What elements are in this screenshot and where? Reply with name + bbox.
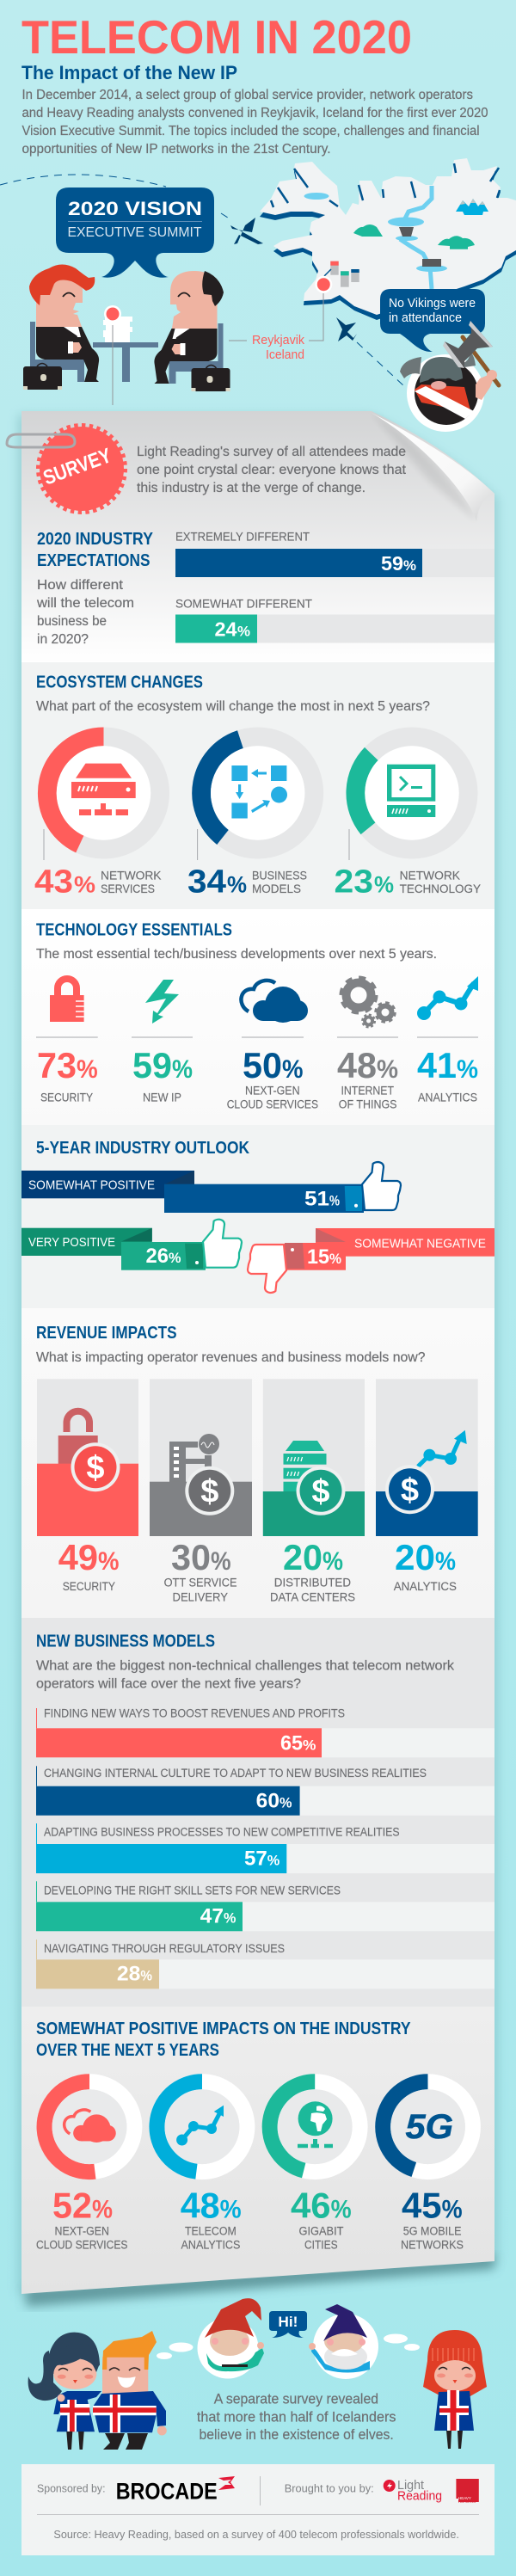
Reykjavik label [229,333,304,362]
man right [154,271,230,391]
stat 49%: 49 [58,1537,98,1577]
ribbon: somewhat negative: 15 [307,1245,329,1269]
intro text [22,88,488,157]
stat 46%: CITIES [304,2238,338,2251]
boy [93,2331,167,2450]
intro text: and Heavy Reading analysts convened in Reykjavik, Iceland for the first ever 2020 [22,106,488,120]
bar: extremely different: 59 [381,552,403,575]
survey text [137,445,407,495]
stat 43%: NETWORK [101,870,162,882]
donut: network services [47,736,160,850]
bar: regulatory issues: % [140,1968,152,1984]
bar: internal culture: 60 [256,1790,280,1813]
river [388,186,447,289]
stat 41% analytics: % [457,1055,478,1084]
stat 43%: % [74,872,95,898]
stat 20% data centers: DATA CENTERS [270,1590,355,1603]
survey badge: SURVEY [40,444,114,490]
icon: cloud [241,981,308,1023]
paper side shadow [18,415,498,2295]
stat 48% IoT: INTERNET [341,1085,394,1097]
ribbon: very positive: % [169,1250,181,1266]
icon: thumb up green [203,1220,242,1268]
icon: chart [176,2106,224,2145]
stat 59% new IP: NEW IP [143,1091,181,1104]
ribbon: somewhat negative: % [329,1251,341,1267]
survey text: this industry is at the verge of change. [137,481,366,495]
ribbon: somewhat negative: SOMEWHAT NEGATIVE [354,1237,486,1251]
stat 46%: % [331,2195,352,2223]
heading: ECOSYSTEM CHANGES [36,673,203,692]
stat 52% [36,2185,127,2251]
donut: network technology [355,736,469,850]
plane top [230,218,263,244]
heading: OVER THE NEXT 5 YEARS [36,2041,219,2060]
heading: TECHNOLOGY ESSENTIALS [36,921,232,940]
paper bottom shadow [26,2255,494,2307]
bar: internal culture: % [280,1795,292,1811]
stat 20% data centers: 20 [283,1537,322,1577]
icon: thumb down [248,1245,286,1293]
stat 73% security [37,1045,98,1104]
stat 30%: 30 [171,1537,211,1577]
bar: skill sets: DEVELOPING THE RIGHT SKILL SETS FOR NEW SERVICES [44,1884,341,1897]
elves text: believe in the existence of elves. [200,2426,394,2443]
stat 49%: % [98,1547,119,1576]
stat 49% [58,1537,119,1593]
stat 34%: 34 [187,864,226,901]
question [36,578,134,647]
column: OTT service delivery: $ [200,1474,218,1510]
bar: skill sets: 47 [200,1905,224,1928]
stat 41% analytics: 41 [417,1045,457,1085]
divider line [37,2514,479,2515]
column: OTT service delivery [150,1379,252,1536]
summit bubble [56,188,214,278]
bar: skill sets [36,1881,494,1931]
stat 50% cloud [227,1045,318,1111]
bar: boost revenues: % [303,1737,316,1753]
stat 48% IoT: % [377,1055,398,1084]
stat 48%: 48 [181,2185,220,2225]
icon: globe [298,2101,333,2148]
elves text [197,2390,396,2443]
heading: 2020 INDUSTRY [37,530,154,549]
mountains [456,199,488,215]
icon: cloud red [64,2110,116,2143]
stat 41% analytics: ANALYTICS [418,1091,477,1104]
man left [23,265,99,390]
heading [37,530,154,570]
donut: 5G mobile [383,2081,473,2172]
question [36,1659,454,1692]
question: What part of the ecosystem will change the most in next 5 years? [36,699,430,714]
viking [400,351,496,432]
bar: regulatory issues: 28 [117,1963,140,1986]
Hi speech bubble: Hi! [278,2314,298,2330]
thought bubbles [157,2334,420,2359]
stat 59% new IP: 59 [132,1045,172,1085]
stat 43%: 43 [34,864,73,901]
stat 49%: SECURITY [63,1580,115,1593]
column: analytics [376,1379,478,1536]
stat 45%: 5G MOBILE [403,2224,461,2237]
stat 41% analytics [417,1045,478,1104]
flight path bottom [357,342,405,387]
gnome left [198,2298,264,2379]
stat 20% analytics: ANALYTICS [394,1580,457,1593]
bar: somewhat different [175,597,494,643]
bar: extremely different: EXTREMELY DIFFERENT [175,530,310,544]
bar: business processes: ADAPTING BUSINESS PROCESSES TO NEW COMPETITIVE REALITIES [44,1825,400,1838]
paperclip [7,434,75,447]
Hi speech bubble [269,2311,307,2338]
logo: Light Reading: Light [397,2478,425,2493]
stat 23%: % [374,872,394,898]
stat 52%: NEXT-GEN [55,2224,109,2237]
axe [443,321,499,385]
panel: footer [22,2464,494,2555]
heading: EXPECTATIONS [37,551,150,570]
column: distributed data centers: $ [311,1474,330,1510]
icon: analytics chart [417,976,478,1020]
question: business be [37,614,107,629]
stat 59% new IP: % [172,1055,193,1084]
elves text: A separate survey revealed [214,2390,378,2407]
bar: extremely different: % [403,557,416,574]
map of Iceland [260,158,516,341]
stat 30%: OTT SERVICE [164,1576,237,1589]
ribbon: somewhat positive: % [329,1193,340,1209]
intro text: Vision Executive Summit. The topics included the scope, challenges and financial [22,124,480,138]
heading: SOMEWHAT POSITIVE IMPACTS ON THE INDUSTRY [36,2020,411,2038]
bar: somewhat different: % [237,623,250,640]
ribbon: very positive: VERY POSITIVE [28,1235,115,1250]
page curl [372,413,494,521]
ribbon: somewhat positive: 51 [304,1188,329,1211]
intro text: opportunities of New IP networks in the 21st Century. [22,142,330,157]
Reykjavik pin [309,269,332,341]
heading: 5-YEAR INDUSTRY OUTLOOK [36,1139,249,1158]
plane bottom [336,317,357,341]
bar: boost revenues [36,1707,494,1757]
icon: lightning bolt [145,980,179,1024]
ribbon: somewhat negative [248,1228,494,1293]
icon: server [71,764,136,815]
stat 30%: DELIVERY [172,1590,228,1603]
sponsor label: Sponsored by: [37,2482,105,2495]
lake [304,193,329,200]
icon: 5G: 5G [406,2108,453,2146]
bar: skill sets: % [224,1910,236,1927]
stat 52%: 52 [52,2185,92,2225]
bar: somewhat different: SOMEWHAT DIFFERENT [175,597,312,611]
question: will the telecom [36,596,134,611]
stat 50% cloud: 50 [243,1045,282,1085]
ribbon: very positive [22,1220,242,1270]
logo: Heavy Reading: READING [458,2499,476,2504]
source: Source: Heavy Reading, based on a survey of 400 telecom professionals worldwide. [53,2528,459,2541]
stat 50% cloud: NEXT-GEN [245,1085,300,1097]
logo: Heavy Reading: HEAVY [458,2496,471,2500]
stat 23% [334,864,481,901]
ribbon: very positive: 26 [146,1245,169,1268]
stat 46%: GIGABIT [299,2224,344,2237]
panel: somewhat positive impacts [22,2007,494,2294]
bar: internal culture: CHANGING INTERNAL CULTURE TO ADAPT TO NEW BUSINESS REALITIES [44,1767,427,1780]
dams [399,227,441,267]
bar: boost revenues: 65 [280,1731,303,1755]
stat 20% analytics: 20 [395,1537,435,1577]
question: What are the biggest non-technical challenges that telecom network [36,1659,454,1674]
tick lines [44,829,349,860]
donut: telecom analytics [157,2081,247,2172]
logo: Heavy Reading [456,2479,479,2504]
stat 20% analytics: % [435,1547,456,1576]
stat 50% cloud: CLOUD SERVICES [227,1098,318,1111]
stat 45% [401,2185,464,2251]
logo: Light Reading: Reading [397,2489,442,2504]
separators [36,1036,478,1038]
logo: Light Reading [384,2478,442,2504]
stat 43% [34,864,162,901]
question: in 2020? [37,632,89,647]
column: security: $ [86,1450,105,1486]
bar: business processes: % [267,1852,280,1868]
viking speech bubble [380,289,485,352]
survey text: Light Reading's survey of all attendees made [137,445,406,459]
question: What is impacting operator revenues and business models now? [36,1350,426,1365]
viking speech bubble: in attendance [389,311,462,325]
stat 48%: TELECOM [185,2224,236,2237]
elves text: that more than half of Icelanders [197,2408,396,2425]
icon: terminal [387,765,435,817]
Reykjavik label: Reykjavik [252,333,304,347]
stat 34%: BUSINESS [252,870,307,882]
stat 34%: % [227,872,247,898]
survey badge [38,425,126,513]
stat 73% security: SECURITY [40,1091,93,1104]
icon: flow diagram [231,765,287,819]
stat 34% [187,864,307,901]
viking speech bubble: No Vikings were [389,297,476,310]
logo: Brocade: BROCADE [116,2479,218,2505]
question: How different [37,578,124,593]
stat 48% IoT [337,1045,398,1111]
stat 23%: TECHNOLOGY [400,882,481,895]
stat 23%: NETWORK [400,870,460,882]
subtitle: The Impact of the New IP [22,62,237,83]
icon: thumb up [362,1162,401,1210]
stat 43%: SERVICES [101,882,155,895]
donut: business models [201,736,314,850]
donut: gigabit cities [270,2081,360,2172]
stat 30% [164,1537,237,1603]
paper stack and pin [103,305,132,405]
summit bubble: 2020 VISION [68,198,202,219]
panel: technology essentials [22,909,494,1125]
bar: business processes: 57 [244,1847,267,1870]
icon: lock [50,979,84,1022]
stat 46%: 46 [291,2185,331,2225]
stat 34%: MODELS [252,882,301,895]
bar: internal culture [36,1766,494,1816]
stat 52%: CLOUD SERVICES [36,2238,127,2251]
stat 23%: 23 [334,864,373,901]
panel: 5-year industry outlook [22,1125,494,1308]
gnome right [309,2304,378,2379]
question: The most essential tech/business developments over next 5 years. [36,947,437,962]
column: analytics: $ [401,1472,419,1509]
icon: gears [341,978,395,1027]
panel: new business models [22,1618,494,2007]
stat 45%: 45 [402,2185,442,2225]
title: TELECOM IN 2020 [22,11,412,64]
stat 48%: ANALYTICS [181,2238,240,2251]
stat 20% data centers: % [322,1547,343,1576]
stat 20% data centers: DISTRIBUTED [274,1576,351,1589]
flight path top [0,175,230,219]
panel: ecosystem changes [22,662,494,909]
survey text: one point crystal clear: everyone knows that [137,463,407,477]
buildings [330,261,359,287]
stat 48%: % [220,2195,242,2223]
stat 20% data centers [270,1537,355,1603]
divider [260,2476,261,2505]
ribbon: somewhat positive: SOMEWHAT POSITIVE [28,1178,155,1193]
column: security [37,1379,138,1536]
credit label: Brought to you by: [285,2482,374,2495]
donut: next-gen cloud [45,2081,134,2172]
stat 48% IoT: OF THINGS [339,1098,397,1111]
stat 45%: NETWORKS [401,2238,464,2251]
hills [353,224,475,249]
stat 20% analytics [394,1537,457,1593]
stat 59% new IP [132,1045,193,1104]
survey section paper [22,411,494,663]
question: operators will face over the next five years? [36,1677,301,1692]
stat 45%: % [442,2195,463,2223]
stat 30%: % [211,1547,231,1576]
girl left [28,2333,101,2450]
meeting table [93,342,158,382]
stat 50% cloud: % [282,1055,303,1084]
bar: boost revenues: FINDING NEW WAYS TO BOOST REVENUES AND PROFITS [44,1707,345,1720]
girl right [423,2330,487,2449]
heading: NEW BUSINESS MODELS [36,1632,215,1651]
bar: regulatory issues [36,1940,494,1989]
bar: regulatory issues: NAVIGATING THROUGH REGULATORY ISSUES [44,1942,285,1955]
bar: somewhat different: 24 [215,618,237,640]
panel: 2020 industry expectations [36,530,494,647]
stat 48% IoT: 48 [337,1045,377,1085]
heading: REVENUE IMPACTS [36,1324,177,1343]
stat 73% security: 73 [37,1045,77,1085]
bar: extremely different [175,530,494,577]
stat 46% [291,2185,352,2251]
column: distributed data centers [263,1379,365,1536]
stat 48% [181,2185,242,2251]
Reykjavik label: Iceland [266,347,304,362]
bar: business processes [36,1823,494,1873]
heading [36,2020,411,2060]
panel: revenue impacts [22,1308,494,1618]
stat 73% security: % [77,1055,98,1084]
summit bubble: EXECUTIVE SUMMIT [67,225,202,240]
stat 52%: % [92,2195,113,2223]
intro text: In December 2014, a select group of global service provider, network operators [22,88,473,102]
ribbon: somewhat positive [22,1162,401,1213]
